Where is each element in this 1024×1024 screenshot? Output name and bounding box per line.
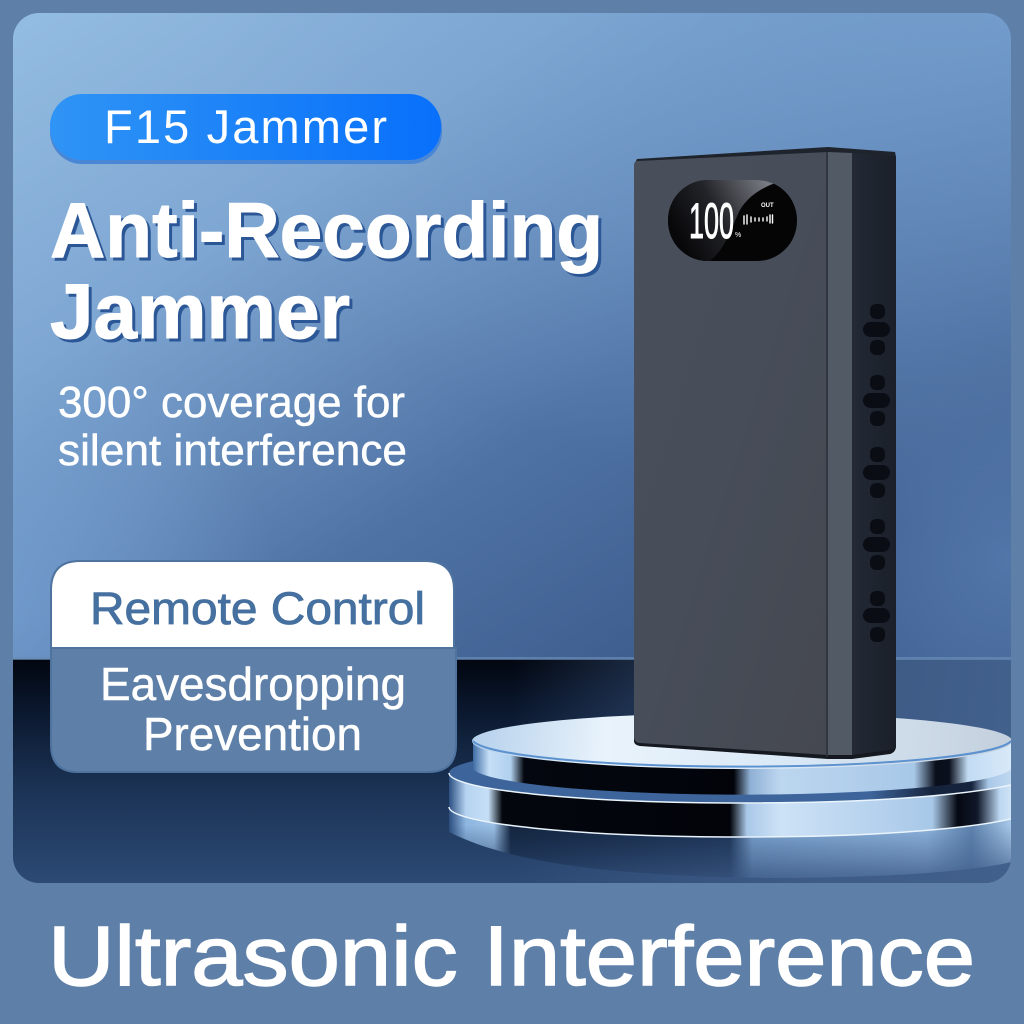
scene floor	[13, 657, 1011, 884]
subheading: coverage	[58, 385, 406, 466]
heading: Anti-Recording Jammer: Jammer	[50, 267, 350, 355]
signal icon	[744, 215, 772, 224]
heading: Anti-Recording Jammer: Jammer	[53, 270, 353, 358]
product: jammer device	[634, 147, 896, 759]
callout: remote control	[51, 561, 456, 772]
footer title: Ultrasonic Interference	[48, 909, 975, 1003]
device LED display: %	[735, 232, 741, 239]
heading: Anti-Recording Jammer: Anti-Recording	[53, 189, 606, 277]
podium lower disk	[448, 761, 1011, 838]
scene wall backdrop	[13, 13, 1011, 663]
reflection under podium	[449, 810, 1011, 878]
OUT label: OUT	[761, 203, 774, 209]
subheading: coverage: silent interference	[58, 426, 407, 475]
device LED display	[668, 180, 797, 261]
heading: Anti-Recording Jammer	[50, 200, 602, 342]
battery percentage: 100	[689, 193, 734, 249]
device side band	[828, 152, 852, 757]
badge: F15 Jammer	[50, 94, 442, 164]
device top edge	[636, 147, 896, 162]
badge: F15 Jammer: F15 Jammer	[104, 100, 387, 153]
device dark side	[852, 153, 896, 757]
podium upper disk	[472, 713, 1012, 795]
heading: Anti-Recording Jammer: Anti-Recording	[50, 186, 603, 274]
device vent holes	[863, 304, 890, 642]
callout: remote control: Prevention	[143, 708, 362, 760]
device front face	[634, 152, 828, 757]
callout: remote control: Remote Control	[90, 583, 425, 634]
subheading: coverage: 300° coverage for	[58, 378, 405, 427]
callout: remote control: Eavesdropping	[100, 658, 406, 710]
